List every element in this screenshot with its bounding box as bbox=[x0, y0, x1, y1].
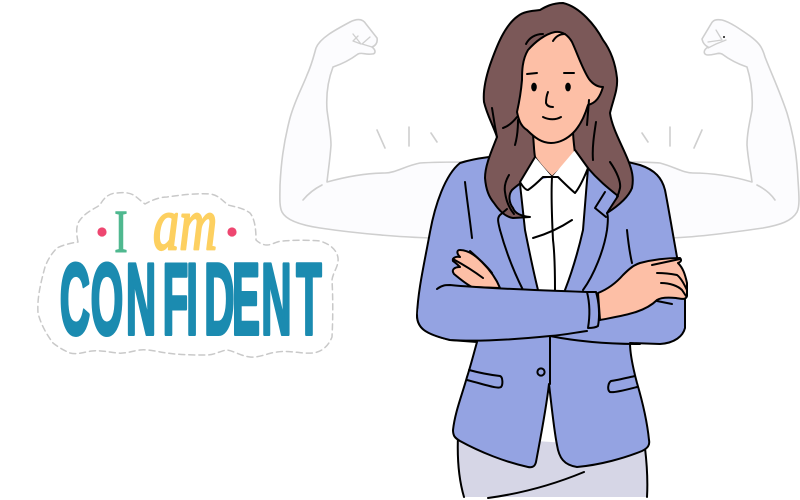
button bbox=[537, 368, 545, 376]
text: am: am bbox=[153, 183, 217, 266]
face bbox=[517, 32, 603, 143]
text: I: I bbox=[114, 199, 128, 266]
left pocket bbox=[467, 370, 502, 388]
flexed arm right bbox=[625, 20, 799, 238]
shirt bbox=[519, 168, 588, 290]
left hand bbox=[453, 250, 500, 288]
tiny dot on right fist bbox=[723, 36, 725, 38]
cuff bbox=[587, 292, 599, 328]
right hand bbox=[598, 258, 687, 320]
skirt bbox=[458, 436, 647, 498]
front sleeve bbox=[417, 285, 599, 341]
sticker outline bbox=[38, 193, 338, 357]
sticker: I am confident bbox=[38, 183, 338, 357]
hair bbox=[484, 3, 633, 218]
lapel right bbox=[595, 192, 606, 217]
eyes bbox=[531, 83, 571, 91]
pink dots bbox=[97, 227, 237, 237]
flexed arm left bbox=[280, 20, 470, 238]
hair strands bbox=[492, 100, 620, 214]
right pocket bbox=[608, 376, 637, 392]
neck bbox=[533, 130, 575, 177]
woman bbox=[417, 3, 687, 498]
text: CONFIDENT: CONFIDENT bbox=[60, 244, 322, 356]
jacket bbox=[417, 155, 685, 467]
collar bbox=[520, 150, 588, 193]
